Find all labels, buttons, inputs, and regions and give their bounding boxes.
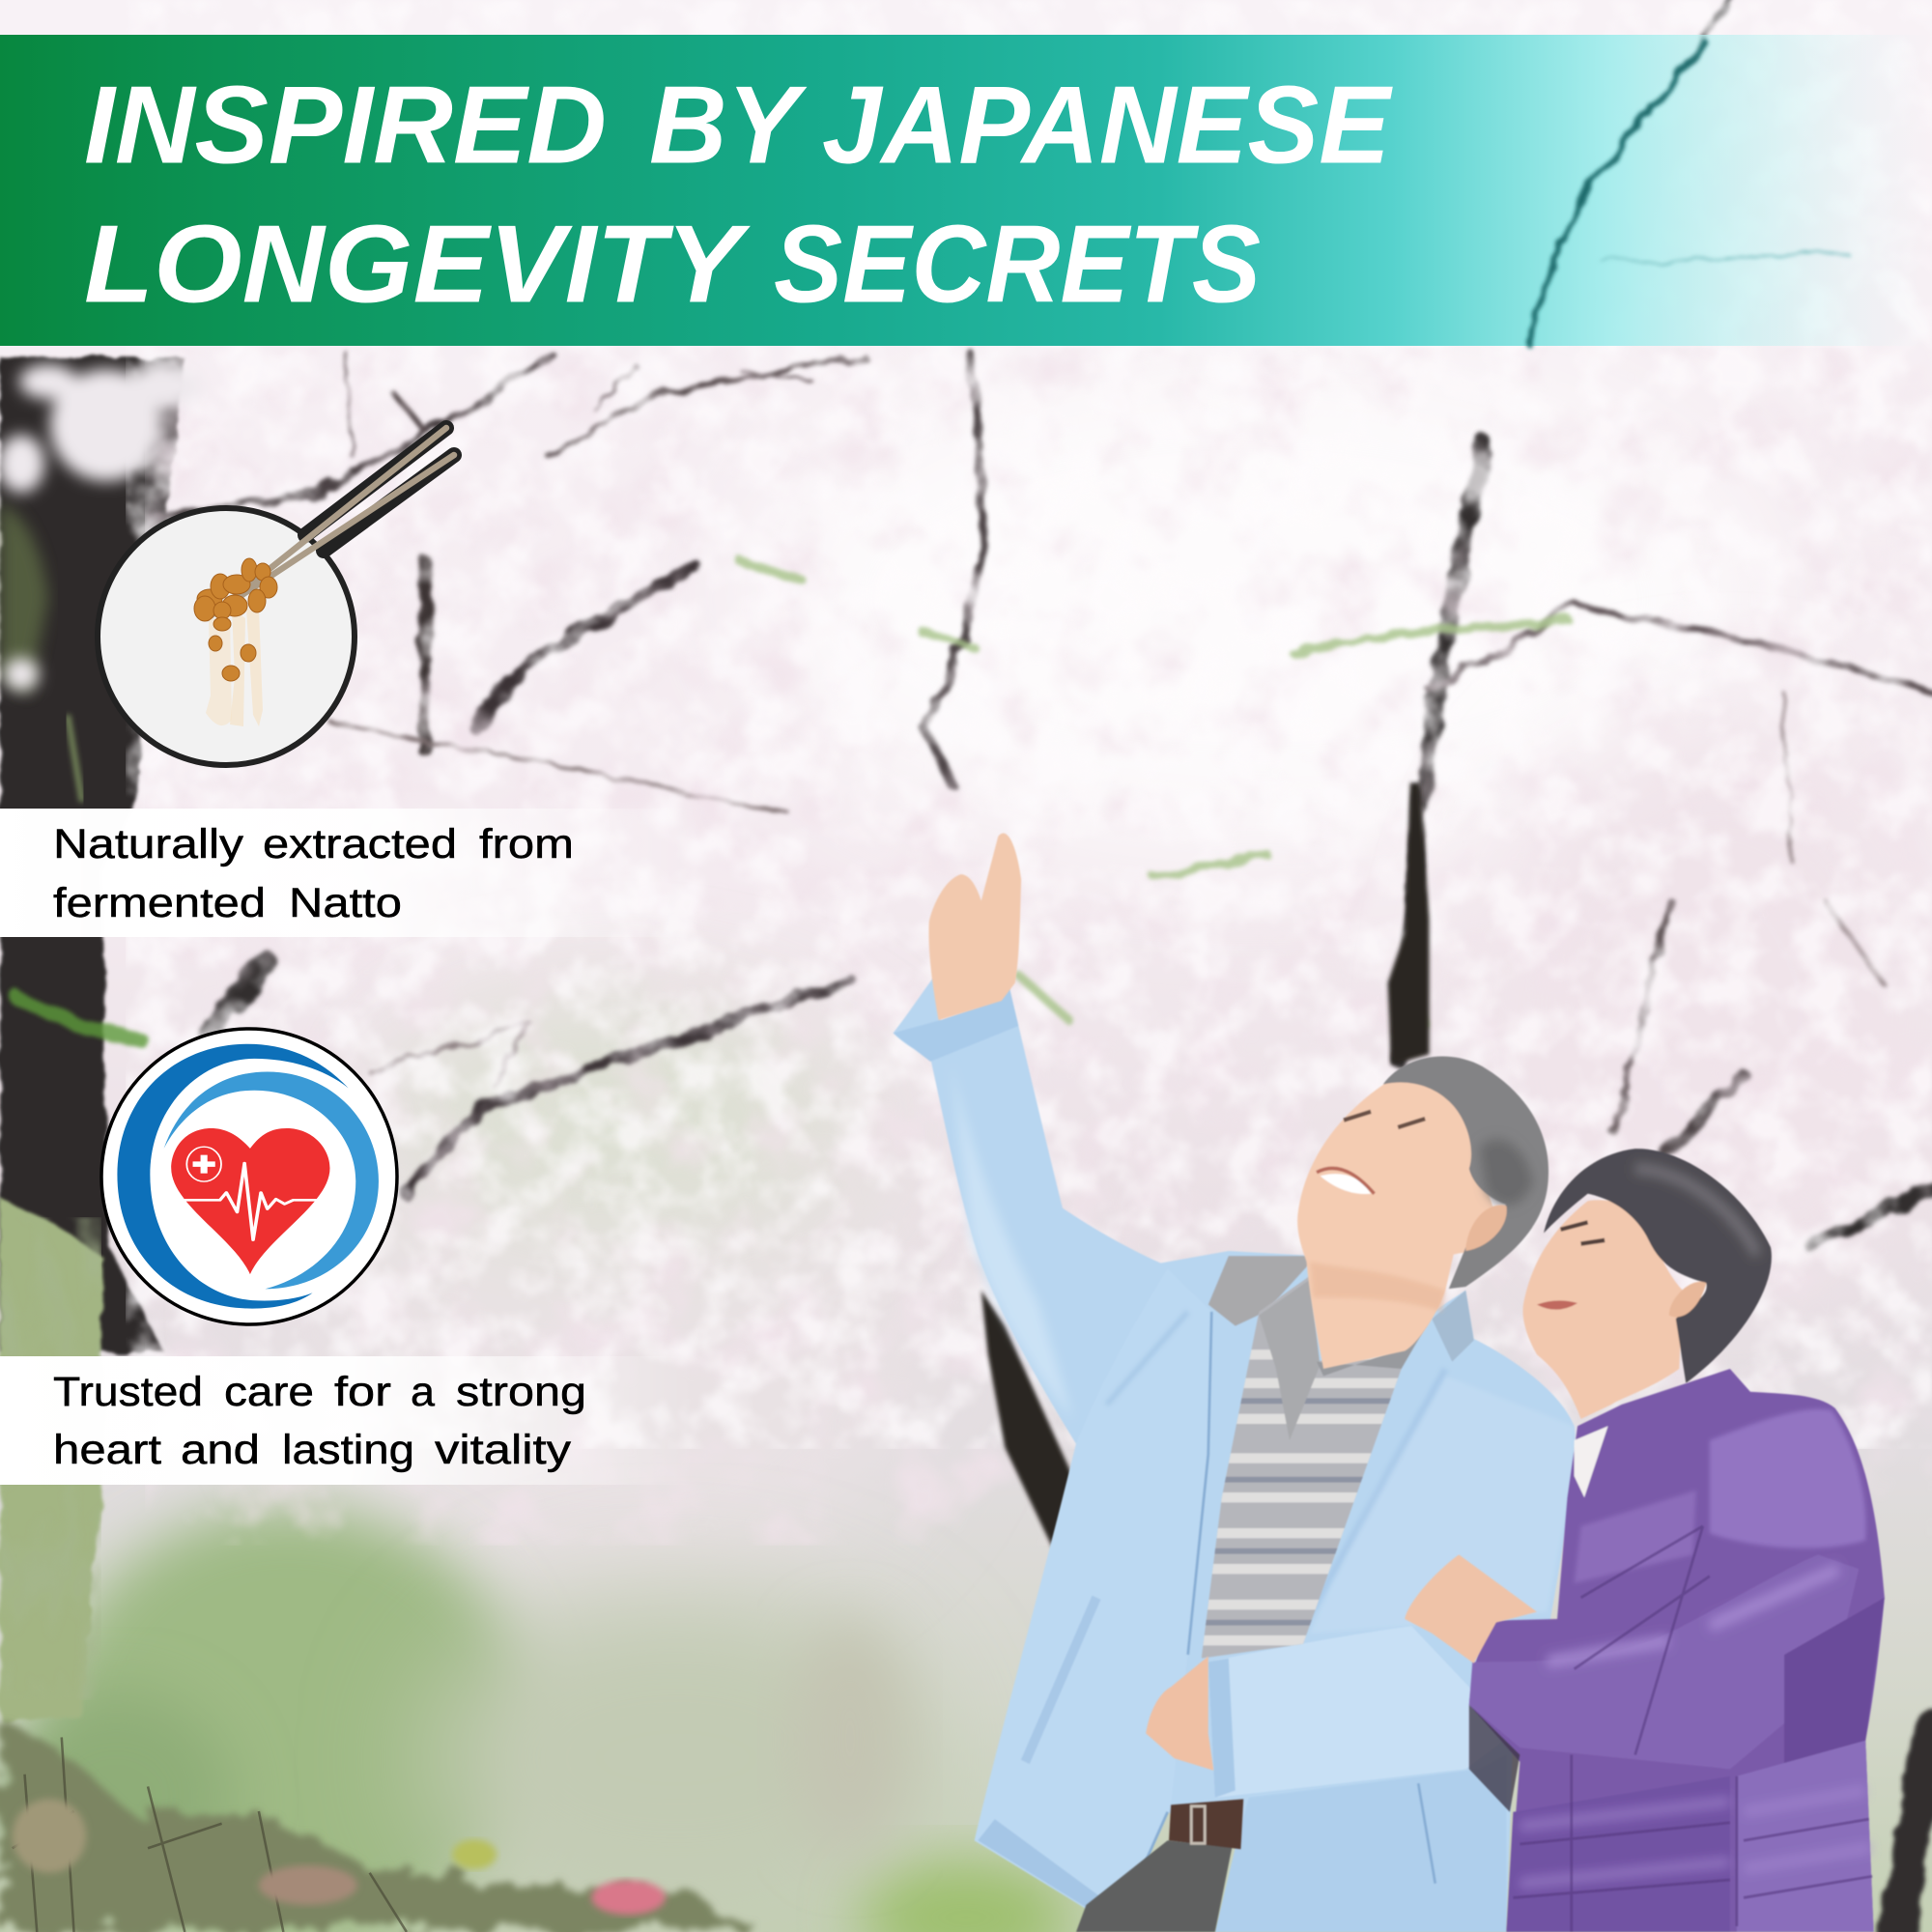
green leaf clusters [17, 560, 1571, 1041]
outer blue swirl [117, 1044, 349, 1309]
woman: head [1523, 1149, 1772, 1419]
caption text: heart: vitality [435, 1427, 572, 1473]
man: pointing hand [928, 833, 1021, 1020]
caption text: natto: Natto [289, 880, 402, 926]
title: SECRETS [774, 203, 1261, 327]
title: LONGEVITY [84, 203, 751, 327]
banner [0, 35, 1932, 346]
icon: heart care badge [101, 1029, 397, 1324]
caption strip: natto [0, 809, 696, 937]
left tree trunk [0, 357, 184, 1719]
caption text: natto: Naturally [53, 821, 244, 867]
caption text: natto: fermented [53, 880, 266, 926]
caption text: natto: extracted [263, 821, 457, 867]
title: JAPANESE [822, 64, 1393, 187]
caption text: heart: a [411, 1369, 435, 1415]
photo: senior couple looking up [894, 782, 1885, 1932]
caption text: heart: heart [53, 1427, 161, 1473]
title: BY [649, 64, 808, 187]
red heart [171, 1128, 329, 1274]
caption text: heart: for [334, 1369, 391, 1415]
caption text: heart: lasting [282, 1427, 414, 1473]
man: jacket [894, 978, 1576, 1932]
caption strip: heart [0, 1356, 696, 1485]
woman: purple jacket [1469, 1369, 1885, 1932]
medical cross [186, 1147, 221, 1181]
caption text: natto: from [479, 821, 574, 867]
man: lower hand [1146, 1656, 1213, 1771]
caption text: heart: strong [456, 1369, 586, 1415]
background trunks behind couple [981, 782, 1429, 1548]
caption text: heart: and [181, 1427, 260, 1473]
caption text: heart: Trusted [53, 1369, 203, 1415]
bottom flowering shrubs [0, 1719, 764, 1932]
inner light blue swirl [164, 1071, 379, 1289]
man: head [1297, 1057, 1548, 1369]
man: trousers and belt [1076, 1799, 1243, 1932]
blossom texture over branches [126, 0, 1932, 1546]
man: striped polo shirt [1201, 1277, 1424, 1659]
ECG line [185, 1163, 316, 1240]
icon: natto and chopsticks [98, 428, 454, 765]
title: INSPIRED [84, 64, 607, 187]
lower-left green foliage [0, 1507, 1072, 1932]
top-left white blossoms [0, 364, 203, 691]
caption text: heart: care [224, 1369, 314, 1415]
woman: hand on arm [1405, 1554, 1537, 1663]
